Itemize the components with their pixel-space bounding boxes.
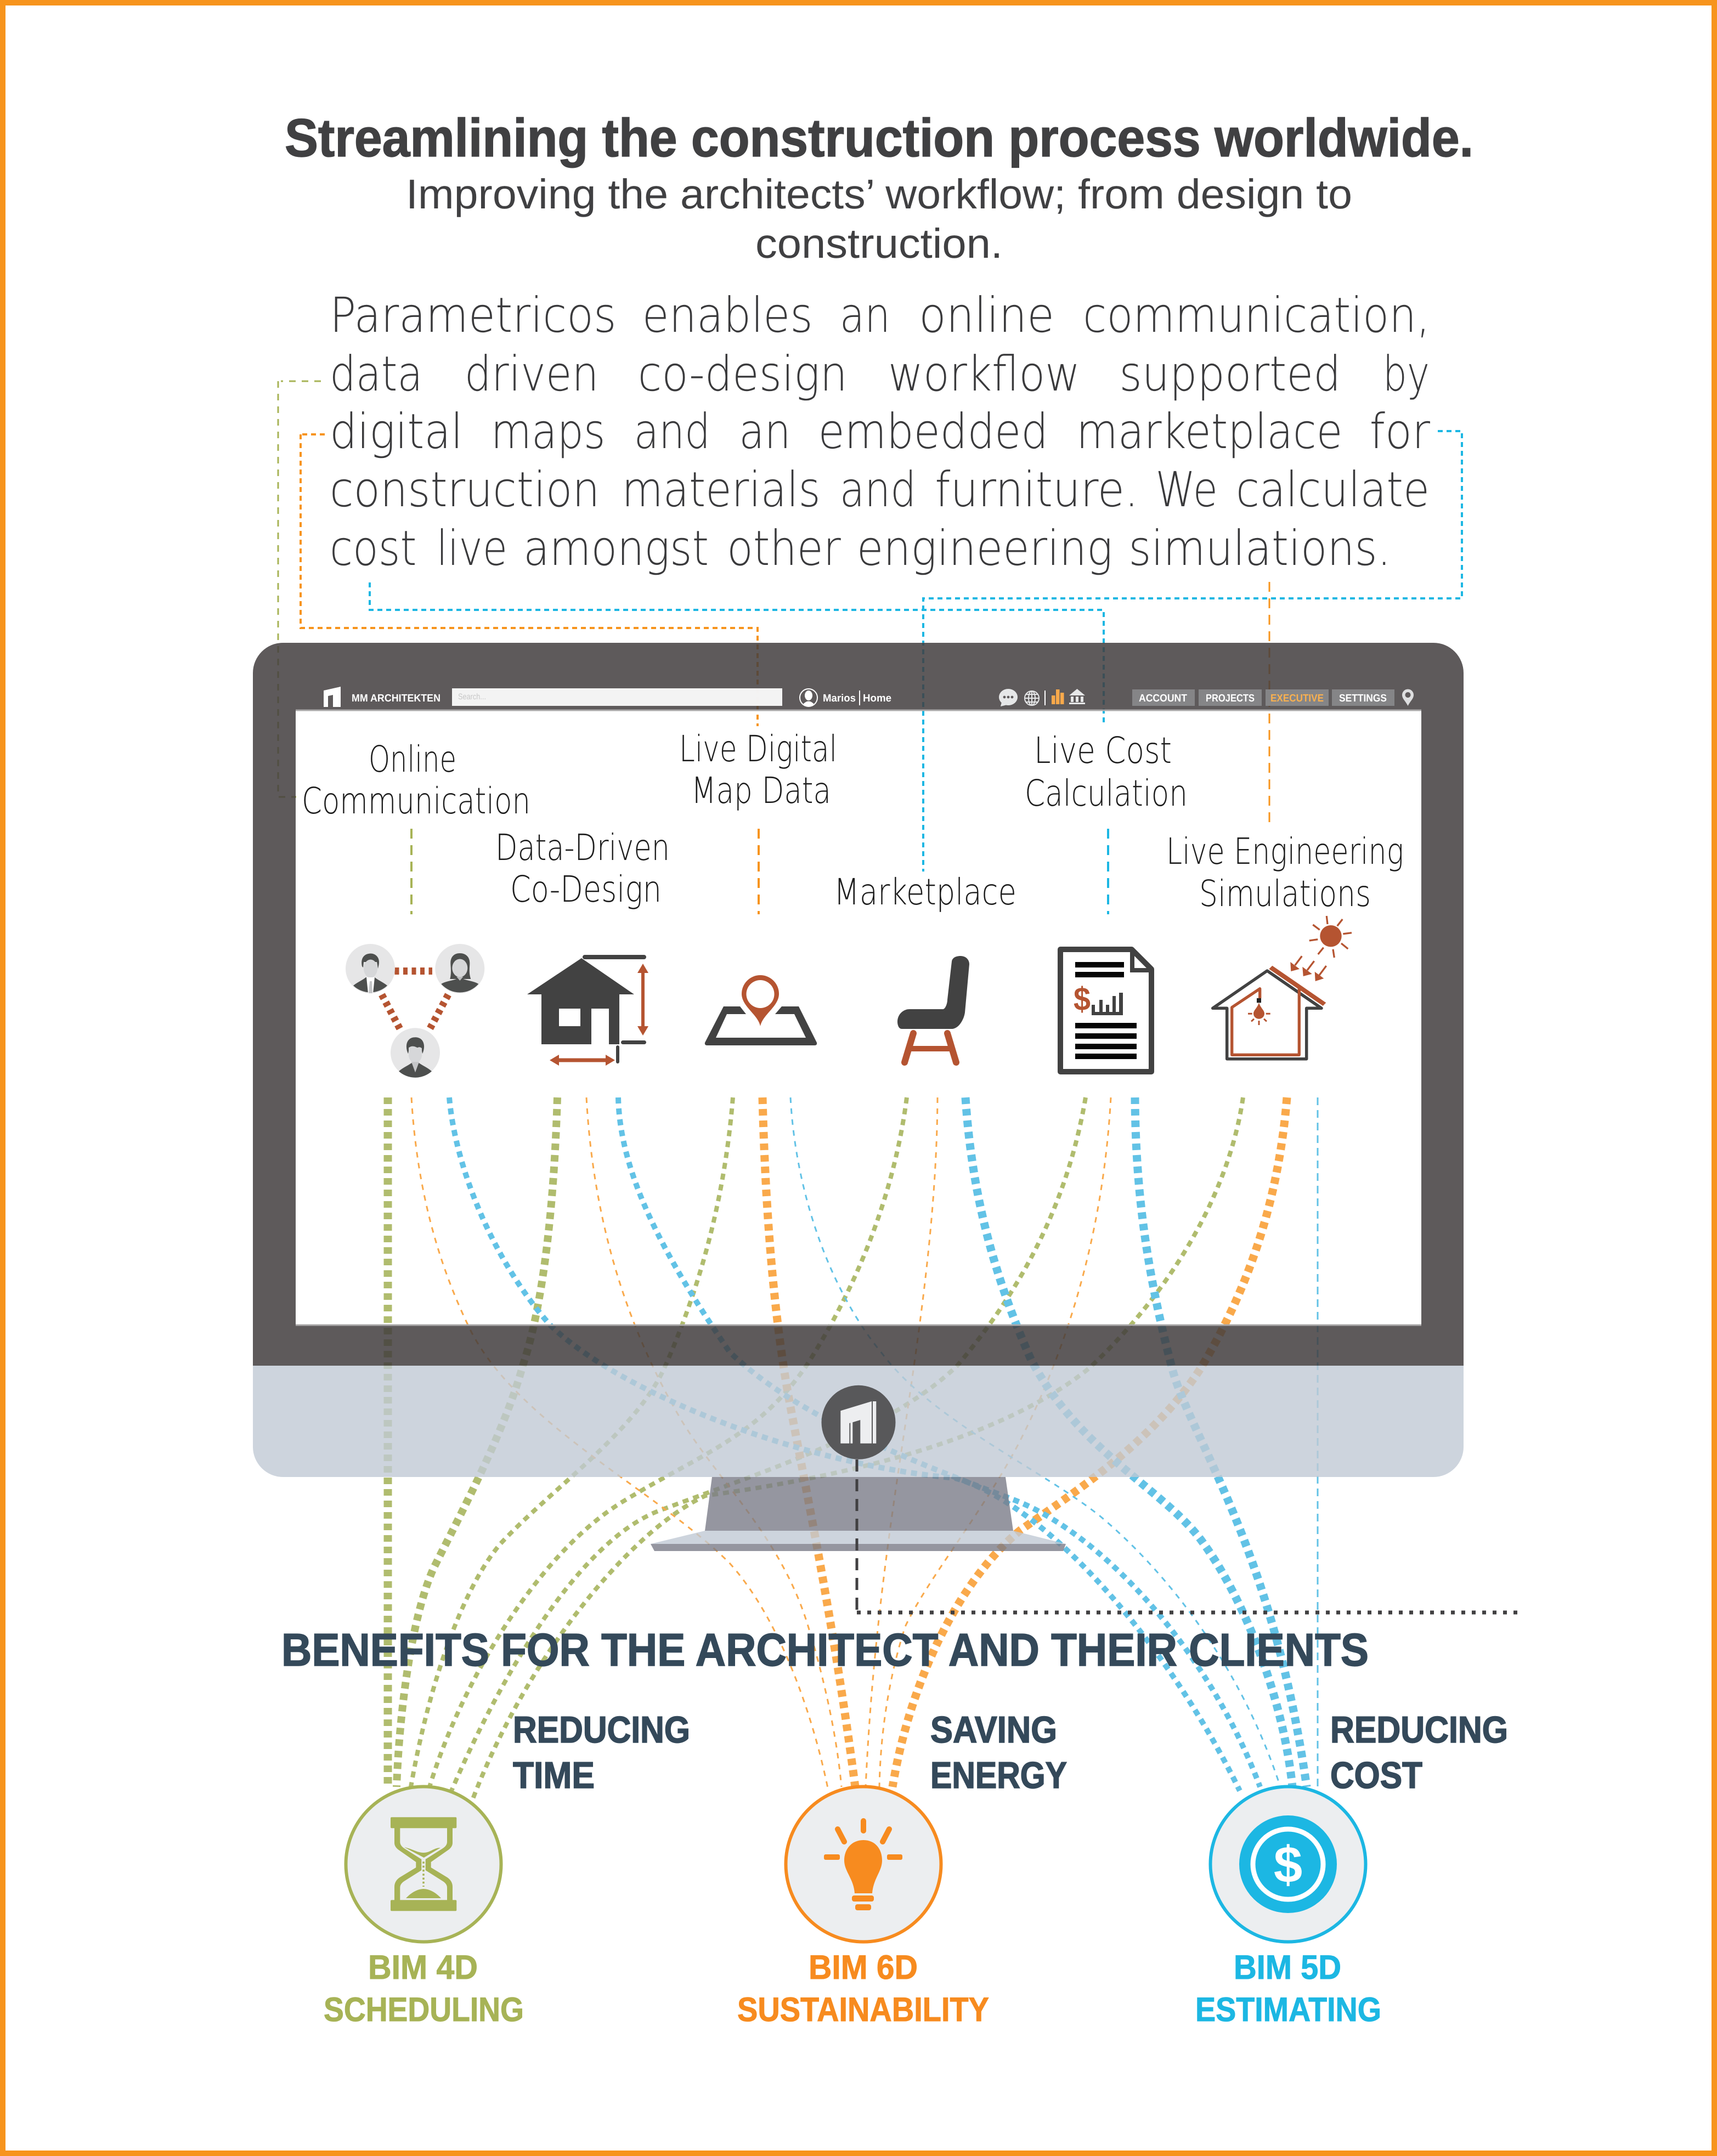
icon: bar chart bbox=[1052, 689, 1064, 704]
benefit text: reducing time bbox=[513, 1709, 690, 1796]
person: third bbox=[391, 1028, 440, 1078]
intro paragraph: Parametricos bbox=[330, 287, 617, 343]
badge: BIM 4D bbox=[324, 1787, 524, 2029]
label: BIM 5D bbox=[1234, 1949, 1341, 1987]
icon: museum bbox=[1069, 689, 1085, 704]
label: online communication: Communication bbox=[302, 780, 530, 822]
benefit text: saving energy: ENERGY bbox=[930, 1755, 1067, 1796]
label: online communication bbox=[302, 738, 530, 822]
label bbox=[1195, 1949, 1381, 2029]
monitor chin bbox=[253, 1366, 1464, 1477]
intro paragraph: for bbox=[1370, 403, 1431, 460]
label: live cost calculation: Live Cost bbox=[1034, 729, 1172, 772]
label: live digital map data: Live Digital bbox=[679, 728, 837, 770]
toolbar bbox=[324, 687, 1414, 707]
label bbox=[737, 1949, 989, 2029]
monitor bezel bbox=[253, 643, 1464, 1366]
search placeholder: Search... bbox=[458, 692, 486, 701]
user text: Home bbox=[863, 693, 891, 704]
screen edges bbox=[296, 710, 1421, 1325]
intro paragraph: workflow bbox=[888, 346, 1080, 402]
icon: map with pin bbox=[705, 975, 817, 1045]
toolbar logo bbox=[324, 687, 341, 707]
connector: orange, live engineering simulations bbox=[1268, 582, 1270, 828]
stand base top bbox=[651, 1531, 1066, 1544]
label: SUSTAINABILITY bbox=[737, 1991, 989, 2029]
intro paragraph: cost bbox=[330, 520, 416, 576]
blue curves to BIM 5D bbox=[449, 1097, 1318, 1791]
intro paragraph: enables bbox=[642, 287, 813, 343]
icon: globe bbox=[1025, 691, 1039, 705]
menu buttons: ACCOUNT bbox=[1139, 693, 1187, 704]
connector: blue, marketplace bbox=[923, 431, 1462, 872]
company name: MM ARCHITEKTEN bbox=[352, 693, 440, 704]
icon: solar house bbox=[1213, 916, 1352, 1059]
intro paragraph: embedded bbox=[818, 403, 1048, 460]
toolbar divider bbox=[1044, 691, 1046, 705]
intro paragraph: online bbox=[919, 287, 1054, 343]
label: live cost calculation: Calculation bbox=[1025, 772, 1188, 814]
intro paragraph: construction bbox=[330, 461, 600, 518]
menu buttons: SETTINGS bbox=[1339, 693, 1387, 704]
label: SCHEDULING bbox=[324, 1991, 524, 2029]
monitor stand bbox=[705, 1477, 1013, 1531]
orange curves to BIM 6D bbox=[411, 1097, 1287, 1788]
label: live engineering simulations: Simulations bbox=[1199, 873, 1371, 915]
intro paragraph: simulations. bbox=[1128, 520, 1391, 576]
intro paragraph: digital bbox=[330, 403, 463, 460]
connector: green, online communication bbox=[278, 381, 321, 797]
icon: dollar coin bbox=[1239, 1815, 1337, 1913]
mini bar chart bbox=[1092, 993, 1123, 1015]
menu buttons bbox=[1132, 689, 1394, 706]
sun bbox=[1309, 916, 1352, 958]
icon: chat bubble bbox=[999, 689, 1018, 706]
menu buttons: PROJECTS bbox=[1206, 693, 1255, 704]
label: live engineering simulations: Live Engineering bbox=[1166, 830, 1404, 873]
subtitle: construction. bbox=[755, 220, 1003, 267]
benefit text: reducing cost: REDUCING bbox=[1330, 1709, 1508, 1751]
benefit text: reducing cost: COST bbox=[1330, 1755, 1422, 1796]
monitor bbox=[253, 643, 1464, 1551]
intro paragraph: We bbox=[1156, 461, 1218, 518]
label bbox=[324, 1949, 524, 2029]
icon: dollar coin: $ bbox=[1274, 1836, 1302, 1893]
green curves to BIM 4D bbox=[388, 1097, 1243, 1802]
icon: light bulb bbox=[824, 1818, 902, 1910]
icon: hourglass bbox=[391, 1817, 456, 1911]
connector lines from paragraph to feature labels bbox=[278, 381, 1462, 914]
intro paragraph: and bbox=[634, 403, 710, 460]
title: Streamlining the construction process worldwide. bbox=[285, 107, 1473, 168]
label: live digital map data: Map Data bbox=[691, 769, 831, 812]
intro paragraph: marketplace bbox=[1076, 403, 1343, 460]
intro paragraph: furniture. bbox=[935, 461, 1138, 518]
intro paragraph bbox=[330, 287, 1431, 576]
benefit text: reducing cost bbox=[1330, 1709, 1508, 1796]
intro paragraph: engineering bbox=[857, 520, 1112, 576]
dollar sign: $ bbox=[1074, 981, 1091, 1017]
intro paragraph: and bbox=[840, 461, 916, 518]
subtitle: Improving the architects’ workflow; from design to bbox=[406, 171, 1352, 218]
intro paragraph: by bbox=[1383, 346, 1430, 402]
label: live digital map data bbox=[679, 728, 837, 812]
intro paragraph: communication, bbox=[1083, 287, 1430, 343]
dashed connector from logo bbox=[856, 1459, 858, 1612]
user text: Marios bbox=[823, 693, 856, 704]
intro paragraph: co-design bbox=[638, 346, 848, 402]
icon: chair bbox=[897, 956, 969, 1062]
stand base front bbox=[651, 1544, 1066, 1551]
icon: cost document bbox=[1060, 949, 1152, 1072]
feature labels bbox=[302, 728, 1404, 915]
icon: online communication people bbox=[346, 944, 484, 1078]
label: ESTIMATING bbox=[1195, 1991, 1381, 2029]
intro paragraph: amongst bbox=[523, 520, 709, 576]
intro paragraph: driven bbox=[465, 346, 598, 402]
badge: BIM 5D bbox=[1195, 1787, 1381, 2029]
benefit text: saving energy bbox=[930, 1709, 1067, 1796]
benefit text: reducing time: TIME bbox=[513, 1755, 595, 1796]
bulb bbox=[1248, 998, 1270, 1025]
connector: green stub below online communication bbox=[410, 829, 413, 914]
label: marketplace: Marketplace bbox=[834, 871, 1016, 913]
dotted line to the right edge bbox=[857, 1610, 1519, 1615]
intro paragraph: other bbox=[727, 520, 841, 576]
sun arrows bbox=[1290, 956, 1326, 981]
connector: blue stub below live cost bbox=[1107, 829, 1109, 914]
subtitle bbox=[406, 171, 1352, 267]
monitor logo badge bbox=[822, 1385, 895, 1459]
intro paragraph: calculate bbox=[1236, 461, 1430, 518]
benefit text: reducing time: REDUCING bbox=[513, 1709, 690, 1751]
benefit text: saving energy: SAVING bbox=[930, 1709, 1057, 1751]
intro paragraph: maps bbox=[491, 403, 606, 460]
intro paragraph: data bbox=[330, 346, 423, 402]
search box bbox=[452, 688, 782, 706]
badge: BIM 6D bbox=[737, 1787, 989, 2029]
label: BIM 4D bbox=[368, 1949, 478, 1987]
person: man bbox=[346, 944, 395, 993]
label: live cost calculation bbox=[1025, 729, 1188, 814]
intro paragraph: an bbox=[739, 403, 791, 460]
connector: blue, live cost calculation bbox=[370, 582, 1104, 726]
user text bbox=[823, 691, 891, 705]
label: data-driven co-design: Data-Driven bbox=[495, 827, 670, 869]
user avatar bbox=[800, 689, 817, 706]
label: BIM 6D bbox=[809, 1949, 918, 1987]
benefits heading: BENEFITS FOR THE ARCHITECT AND THEIR CLIENTS bbox=[281, 1624, 1369, 1676]
menu buttons: EXECUTIVE bbox=[1270, 693, 1324, 704]
label: data-driven co-design: Co-Design bbox=[510, 868, 662, 910]
label: data-driven co-design bbox=[495, 827, 670, 910]
label: live engineering simulations bbox=[1166, 830, 1404, 915]
arrow: width bbox=[550, 1055, 615, 1066]
icon: house with dimensions bbox=[527, 955, 648, 1066]
icon: location pin bbox=[1402, 689, 1414, 706]
intro paragraph: live bbox=[437, 520, 507, 576]
connector: orange, live digital map data bbox=[301, 434, 758, 726]
label: online communication: Online bbox=[369, 738, 456, 780]
intro paragraph: an bbox=[840, 287, 890, 343]
connector: orange stub below map data bbox=[758, 829, 760, 914]
person: woman bbox=[435, 944, 484, 993]
dashed links bbox=[382, 971, 448, 1029]
intro paragraph: supported bbox=[1119, 346, 1341, 402]
arrow: height bbox=[637, 964, 648, 1035]
intro paragraph: materials bbox=[622, 461, 821, 518]
